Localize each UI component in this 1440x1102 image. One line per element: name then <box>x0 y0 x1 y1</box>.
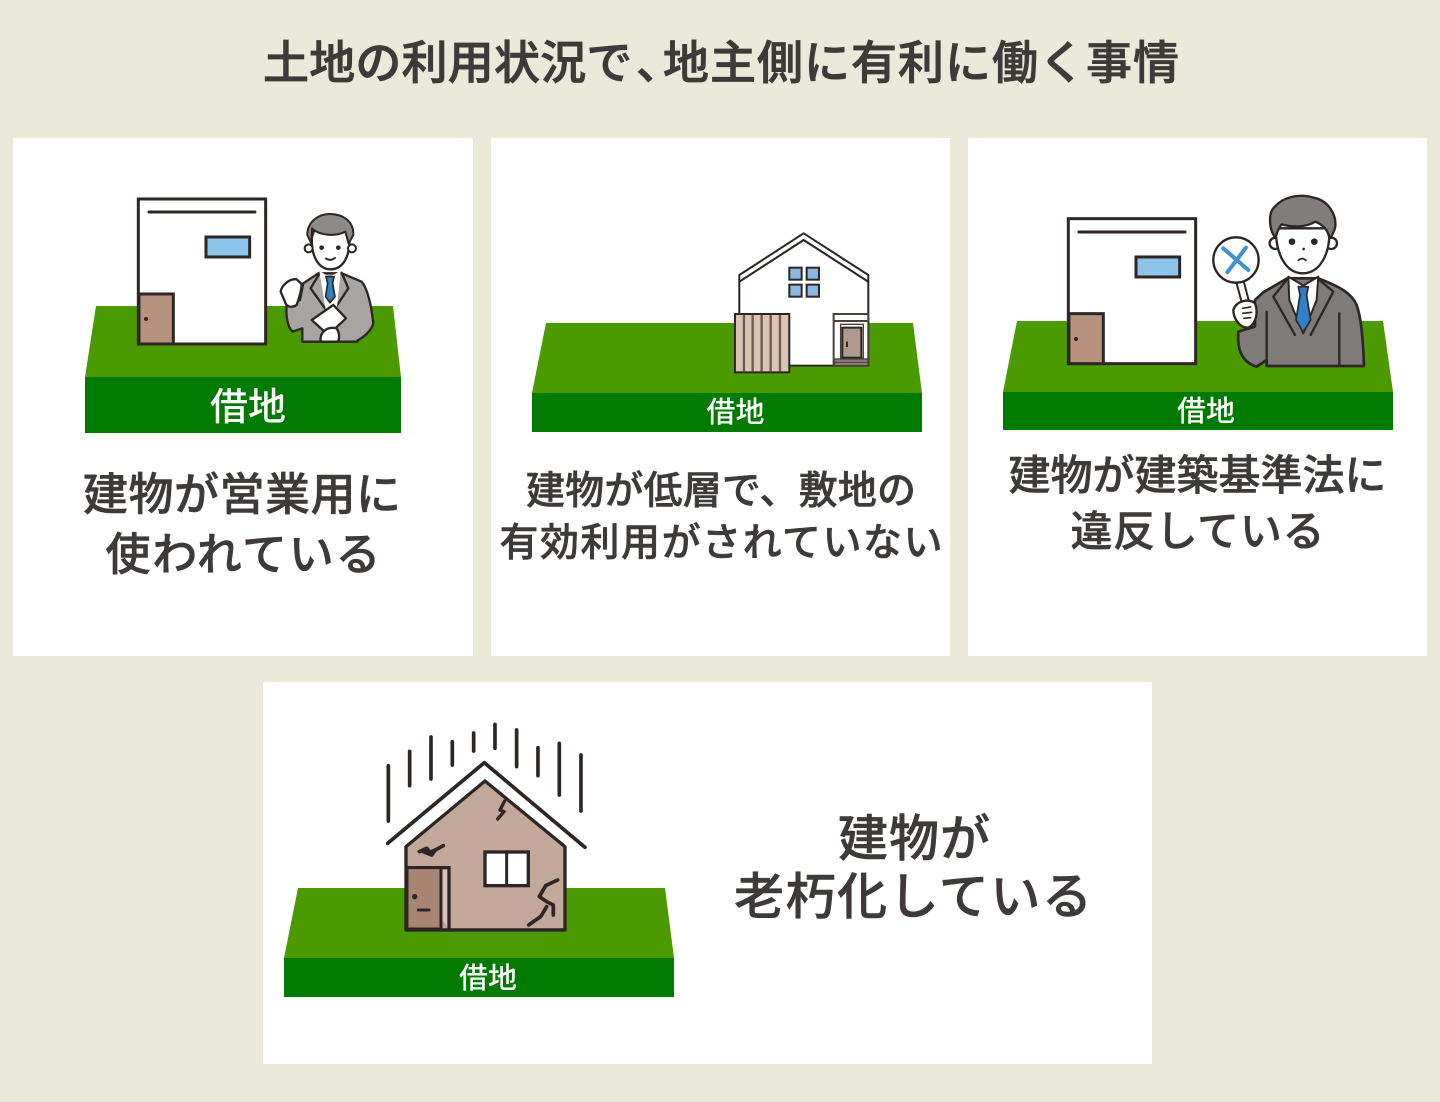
caption: 使われている <box>106 529 380 580</box>
ground plot with label: 借地 <box>1177 395 1235 428</box>
icon: businessman holding cross sign <box>1213 196 1364 367</box>
caption <box>500 470 942 565</box>
icon: commercial building <box>1068 219 1196 364</box>
ground plot with label: 借地 <box>210 387 286 429</box>
caption <box>1008 452 1386 555</box>
caption: 建物が営業用に <box>83 469 401 520</box>
caption: 有効利用がされていない <box>500 522 942 565</box>
ground plot with label <box>284 888 674 997</box>
caption: 建物が <box>838 811 990 867</box>
icon: businessman with document <box>281 214 373 342</box>
panel: building code violation <box>968 138 1427 656</box>
caption: 建物が低層で、敷地の <box>526 470 916 513</box>
ground plot with label <box>1003 321 1393 430</box>
icon: aging cracked house <box>388 724 585 930</box>
ground plot with label: 借地 <box>706 396 765 429</box>
panel: aging building <box>263 682 1152 1064</box>
title: 地主側に有利に働く事情 <box>663 37 1180 89</box>
panel: low-rise building <box>491 138 950 656</box>
caption: 違反している <box>1070 508 1324 555</box>
panel: commercial use <box>13 138 473 656</box>
ground plot with label <box>532 323 922 432</box>
icon: low-rise house with fence <box>735 233 868 372</box>
ground plot with label: 借地 <box>459 962 517 995</box>
caption: 建物が建築基準法に <box>1008 452 1386 499</box>
caption <box>83 469 401 580</box>
caption <box>734 811 1092 925</box>
title: 、 <box>636 37 682 89</box>
ground plot with label <box>85 306 401 433</box>
caption: 老朽化している <box>734 869 1092 925</box>
icon: commercial building <box>138 199 266 344</box>
title: 土地の利用状況で <box>263 37 633 89</box>
